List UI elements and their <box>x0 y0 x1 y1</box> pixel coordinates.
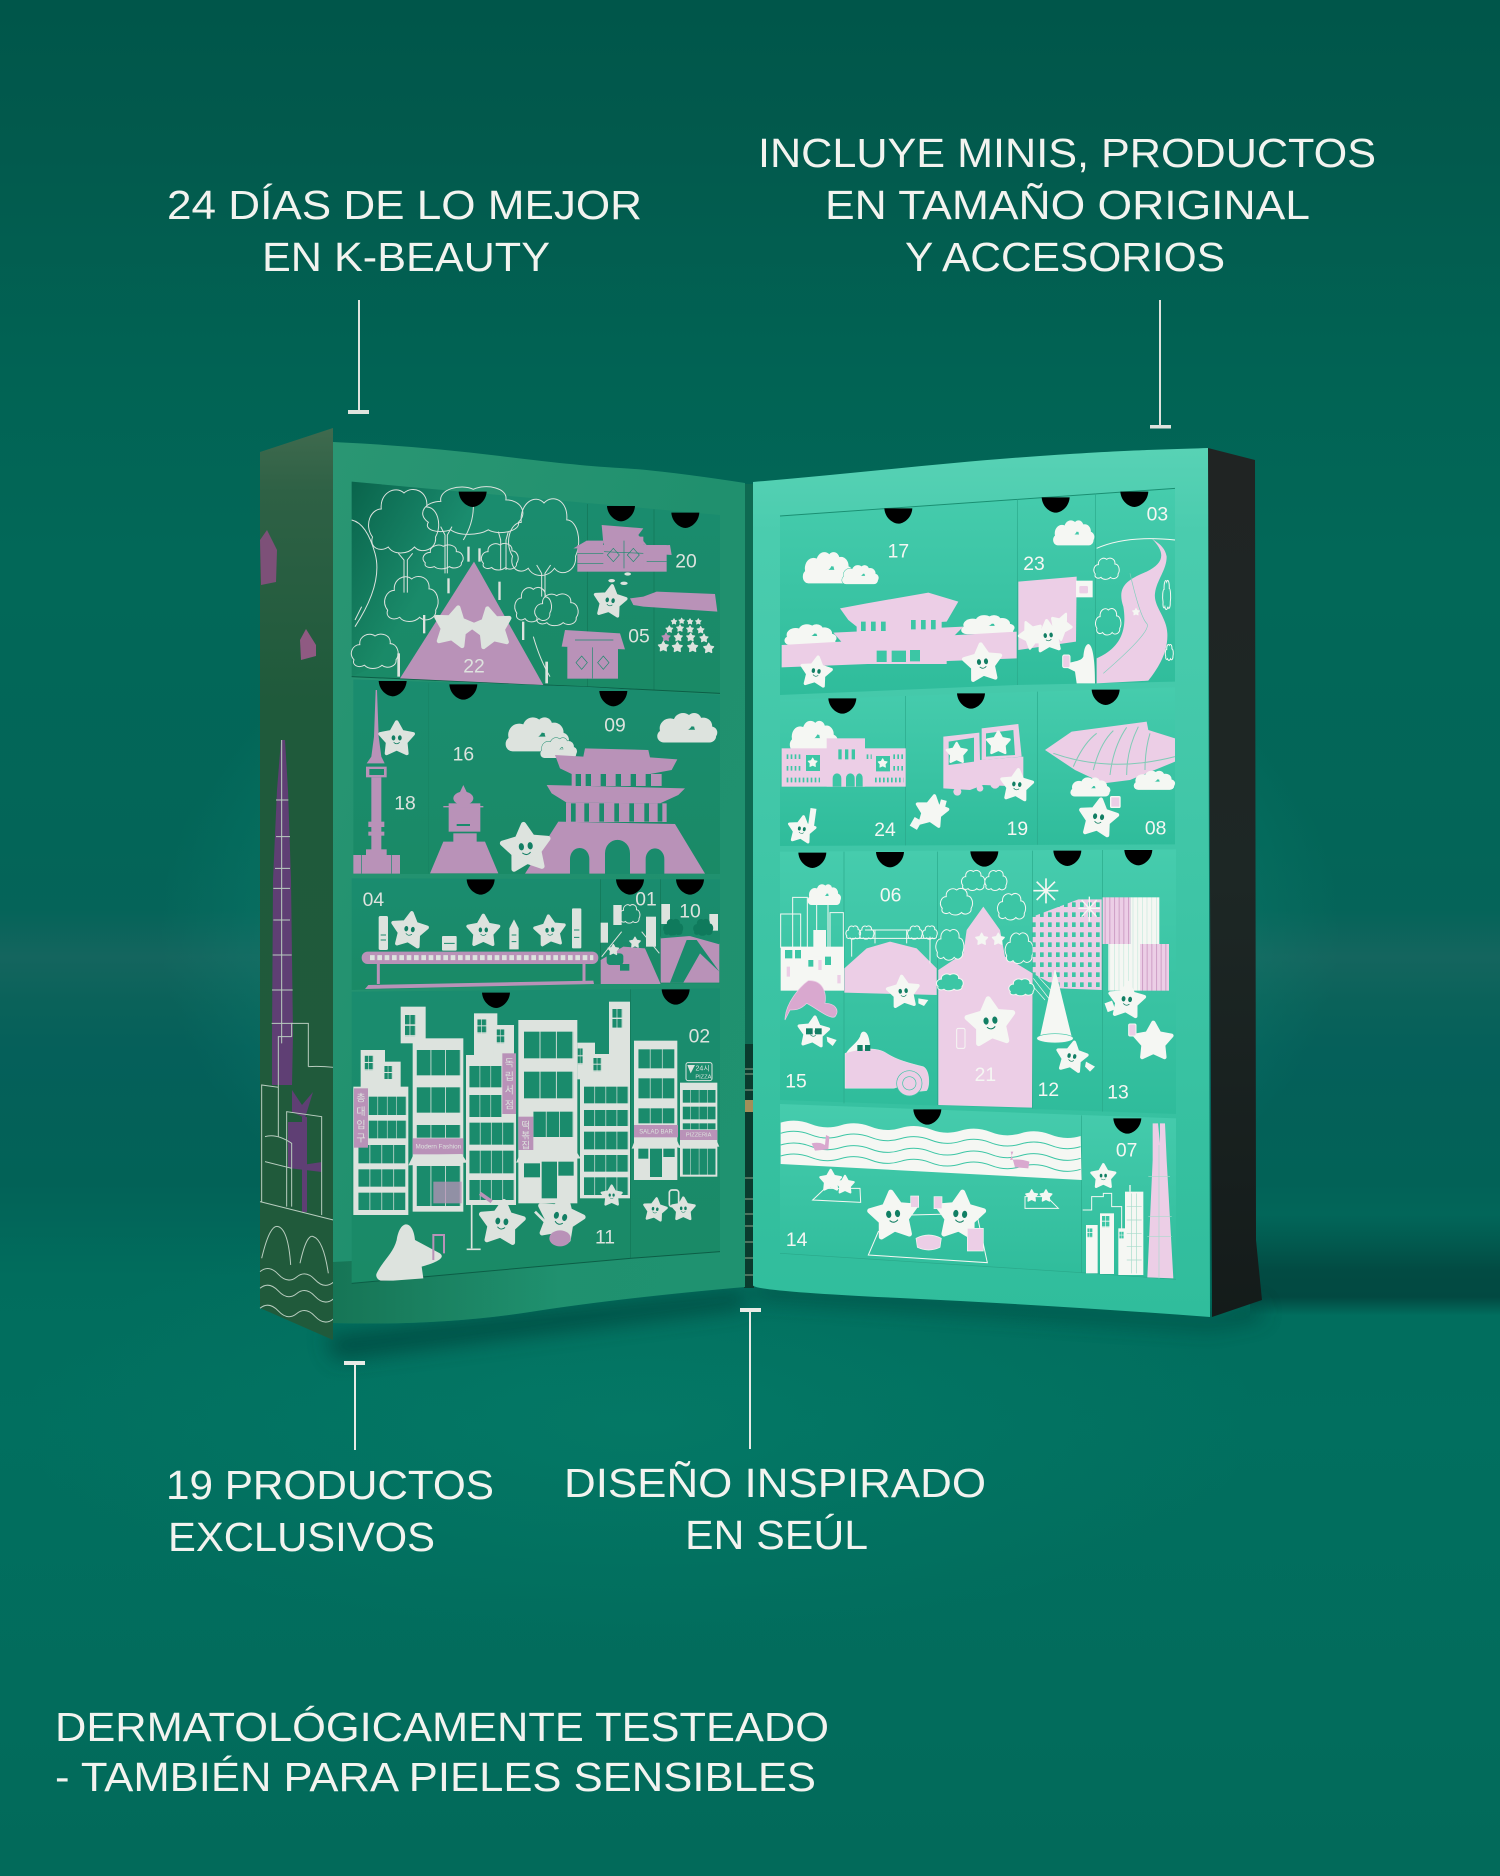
building B <box>401 1007 467 1212</box>
arrow: 19 productos pointer <box>344 1361 365 1450</box>
panel: right door lower drawers <box>780 849 1176 1279</box>
heading: incluye minis: EN TAMAÑO ORIGINAL <box>825 182 1310 228</box>
number 23: 23 <box>1023 554 1045 575</box>
building D: 떡 <box>521 1120 530 1130</box>
building D: 집 <box>521 1139 530 1150</box>
illustration: N Seoul tower <box>353 690 400 874</box>
illustration: street 10 <box>661 904 719 983</box>
illustration: stadium shell <box>1045 722 1175 796</box>
drawer row three <box>352 878 720 990</box>
panel: left door lower drawers <box>352 878 720 1283</box>
forest outlines <box>351 487 579 677</box>
building C: 독 <box>505 1058 514 1070</box>
notches row two <box>828 690 1120 714</box>
left side panel <box>260 428 333 1340</box>
illustration: Gwanghwamun gate <box>525 748 705 874</box>
arrow: 24 días pointer <box>348 300 369 414</box>
number 16: 16 <box>453 745 474 766</box>
illustration: palace <box>782 593 1017 667</box>
heading: 24 días <box>167 182 642 280</box>
drawer row two <box>353 679 720 874</box>
text: diseño inspirado: EN SEÚL <box>685 1512 868 1558</box>
blank star with products <box>910 793 949 830</box>
number 06: 06 <box>880 885 901 906</box>
number 20: 20 <box>675 552 697 573</box>
star by tram <box>1000 768 1034 800</box>
number 12: 12 <box>1038 1080 1059 1101</box>
drawer row three <box>780 849 1176 1114</box>
heading: 24 días: EN K-BEAUTY <box>262 234 550 280</box>
number 17: 17 <box>888 542 909 563</box>
illustration: Han river <box>781 1121 1082 1180</box>
singing star <box>467 1193 525 1249</box>
text: dermatológicamente testeado <box>55 1704 829 1800</box>
building C: 립 <box>505 1070 514 1083</box>
building A: 총 <box>356 1093 366 1105</box>
illustration: statue <box>430 785 498 873</box>
illustration: bridge hill <box>844 926 937 1007</box>
drawer row one <box>352 482 720 693</box>
drawer row four <box>352 988 720 1283</box>
heading: 24 días: 24 DÍAS DE LO MEJOR <box>167 182 642 228</box>
drawer row two <box>780 687 1175 846</box>
building A: 입 <box>356 1118 366 1131</box>
number 18: 18 <box>394 793 416 814</box>
illustration: striped blocks <box>1103 897 1169 991</box>
pizza sign <box>686 1063 712 1081</box>
number 13: 13 <box>1107 1082 1129 1103</box>
illustration: market 01 <box>601 905 661 984</box>
notches row four <box>482 989 690 1008</box>
notches row one <box>459 492 699 528</box>
center spine <box>744 484 754 1288</box>
text: dermatológicamente testeado: DERMATOLÓGICAMENTE TESTEADO <box>55 1704 829 1750</box>
number 11: 11 <box>595 1227 615 1248</box>
small gate <box>562 630 625 679</box>
poles <box>397 547 548 683</box>
number 04: 04 <box>363 890 384 911</box>
building A <box>353 1050 408 1215</box>
building C: 서 <box>505 1084 514 1096</box>
illustration: namsan path: 21 <box>975 1065 996 1086</box>
building B: Modern Fashion <box>415 1143 462 1150</box>
guitar star <box>534 1190 587 1246</box>
text: 19 productos: 19 PRODUCTOS <box>166 1462 494 1508</box>
building C: 점 <box>505 1099 514 1111</box>
side illustration: tower and city <box>260 530 322 1212</box>
star near tower <box>380 722 413 753</box>
left door frame <box>333 442 745 1324</box>
stars by palace <box>800 643 1002 687</box>
building A: 구 <box>356 1134 366 1145</box>
star with thought bubbles <box>593 572 631 617</box>
drawer row four <box>780 1104 1176 1279</box>
notches row two <box>379 681 627 706</box>
illustration: tall office building <box>1033 897 1102 1000</box>
illustration: palace gate <box>573 525 672 572</box>
conveyor belt <box>362 952 598 989</box>
drawer row one <box>780 488 1175 695</box>
building F <box>632 1041 680 1180</box>
illustration: flag and winged star <box>1015 577 1095 683</box>
illustration: museum building <box>782 721 906 787</box>
number 02: 02 <box>689 1027 710 1048</box>
building E <box>577 1002 630 1198</box>
number 14: 14 <box>786 1230 808 1251</box>
star formation <box>658 618 714 653</box>
text: 19 productos <box>166 1462 494 1560</box>
building G <box>678 1083 719 1177</box>
text: 19 productos: EXCLUSIVOS <box>168 1514 435 1560</box>
pizza sign: 24시 <box>696 1065 710 1073</box>
notches row one <box>884 492 1148 524</box>
illustration: city with hand <box>781 884 844 1020</box>
text: dermatológicamente testeado: - TAMBIÉN PARA PIELES SENSIBLES <box>55 1754 816 1800</box>
building F: SALAD BAR <box>639 1129 673 1135</box>
number 24: 24 <box>874 820 896 841</box>
illustration: cone <box>1037 950 1073 1043</box>
star by gate <box>501 822 551 870</box>
building D <box>516 1020 581 1203</box>
illustration: pink mountain with sunglasses stars <box>400 562 543 685</box>
illustration: Lotte tower skyline <box>1083 1123 1173 1278</box>
number 15: 15 <box>785 1072 807 1093</box>
illustration: river <box>1094 538 1175 683</box>
arrow: incluye minis pointer <box>1150 300 1171 428</box>
number 05: 05 <box>628 627 650 648</box>
picnic stars <box>813 1170 1058 1263</box>
right side panel <box>1208 448 1262 1317</box>
heading: incluye minis <box>758 130 1376 280</box>
building A: 대 <box>356 1106 366 1118</box>
notches row four <box>913 1109 1141 1134</box>
text: diseño inspirado: DISEÑO INSPIRADO <box>564 1460 986 1506</box>
number 01: 01 <box>635 889 657 910</box>
number 10: 10 <box>679 901 701 922</box>
panel: advent box <box>260 428 1262 1340</box>
blank star with door <box>376 1224 444 1281</box>
text: diseño inspirado <box>564 1460 986 1558</box>
right door frame <box>753 448 1210 1317</box>
clouds <box>785 520 1094 645</box>
star with bag 12 <box>1055 1040 1095 1072</box>
pizza sign: PIZZA <box>695 1075 712 1081</box>
illustration: tram cars <box>943 724 1023 796</box>
number 08: 08 <box>1145 818 1166 839</box>
number 09: 09 <box>604 716 626 737</box>
sparkle <box>1033 878 1058 903</box>
floor shadows <box>325 1285 1262 1360</box>
building G: PIZZERIA <box>686 1133 712 1139</box>
notches row three <box>467 879 704 895</box>
notches row three <box>798 850 1152 868</box>
panel: left door upper drawers <box>351 482 720 874</box>
building C <box>466 1013 516 1205</box>
pink wall building <box>630 592 717 612</box>
illustration: namsan path <box>936 870 1034 1108</box>
clouds <box>506 713 717 758</box>
number 03: 03 <box>1147 505 1168 526</box>
arrow: diseño pointer <box>740 1308 761 1449</box>
star with sunglasses <box>797 1016 837 1046</box>
small stars <box>602 1186 694 1221</box>
panel: right door upper drawers <box>780 488 1175 846</box>
stars for 13 <box>1105 981 1172 1057</box>
illustration: pink mountain with sunglasses stars: 22 <box>463 656 485 677</box>
star with jar <box>1078 797 1120 836</box>
heading: incluye minis: Y ACCESORIOS <box>905 234 1225 280</box>
building D: 볶 <box>521 1130 530 1140</box>
illustration: car <box>845 1032 929 1096</box>
number 19: 19 <box>1007 819 1028 840</box>
heading: incluye minis: INCLUYE MINIS, PRODUCTOS <box>758 130 1376 176</box>
stars and products on belt <box>379 908 581 951</box>
number 07: 07 <box>1116 1141 1137 1162</box>
star with wand <box>787 808 816 843</box>
